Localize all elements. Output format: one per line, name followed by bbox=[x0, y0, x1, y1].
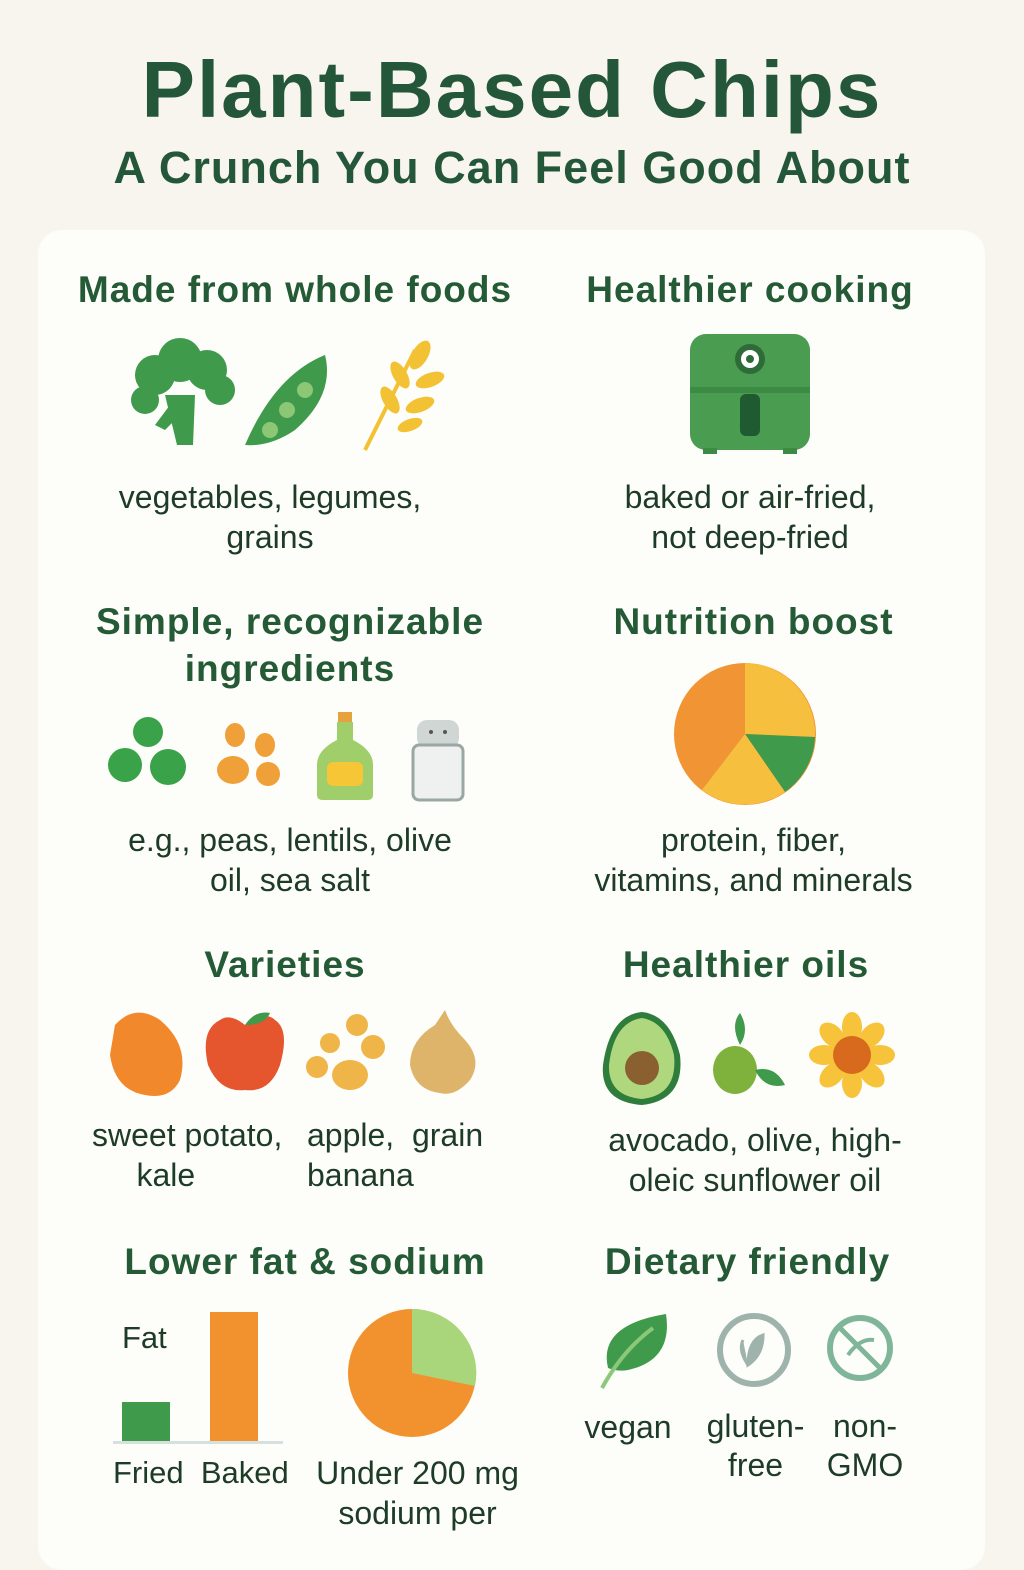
text: cooking: baked or air-fried, bbox=[625, 479, 875, 515]
text: vegan: vegan bbox=[584, 1409, 672, 1445]
text: gluten-free bbox=[707, 1408, 804, 1483]
text: varieties 2: apple, grain bbox=[307, 1117, 483, 1153]
text: non-GMO: non- bbox=[833, 1408, 897, 1444]
title: Plant-Based Chips bbox=[142, 45, 882, 134]
text: ingredients: e.g., peas, lentils, olive bbox=[128, 822, 452, 858]
labels: fried baked: Fried Baked bbox=[113, 1455, 289, 1490]
heading: simple ingredients: ingredients bbox=[185, 648, 395, 689]
heading: lower fat & sodium: Lower fat & sodium bbox=[124, 1241, 486, 1282]
bar: baked bbox=[210, 1312, 258, 1442]
icons: varieties bbox=[110, 1010, 476, 1096]
heading: nutrition boost: Nutrition boost bbox=[613, 601, 894, 642]
text: oils: avocado, olive, high- bbox=[608, 1122, 902, 1158]
text: nutrition bbox=[594, 822, 913, 898]
label: Fat: Fat bbox=[122, 1320, 167, 1355]
text: varieties 2: banana bbox=[307, 1157, 414, 1193]
heading: varieties: Varieties bbox=[204, 944, 366, 985]
bar: fried bbox=[122, 1402, 170, 1442]
icon: air fryer bbox=[690, 334, 810, 454]
text: oils: oleic sunflower oil bbox=[629, 1162, 881, 1198]
heading: healthier cooking: Healthier cooking bbox=[586, 269, 914, 310]
text: whole foods: vegetables, legumes, bbox=[119, 479, 421, 515]
subtitle: A Crunch You Can Feel Good About bbox=[114, 142, 910, 193]
text: nutrition: vitamins, and minerals bbox=[594, 862, 913, 898]
text: ingredients: oil, sea salt bbox=[210, 862, 370, 898]
text: whole foods: grains bbox=[226, 519, 314, 555]
text: oils bbox=[608, 1122, 902, 1198]
text: sodium: Under 200 mg bbox=[316, 1455, 519, 1491]
text: gluten-free: gluten- bbox=[707, 1408, 804, 1444]
heading: dietary friendly: Dietary friendly bbox=[605, 1241, 890, 1282]
text: cooking: not deep-fried bbox=[651, 519, 849, 555]
icons: vegan, gluten-free, non-GMO bbox=[600, 1313, 893, 1389]
text: gluten-free: free bbox=[728, 1447, 783, 1483]
text: non-GMO bbox=[827, 1408, 903, 1483]
text: sodium bbox=[316, 1455, 519, 1531]
text: varieties bbox=[92, 1117, 282, 1193]
text: varieties 2 bbox=[307, 1117, 483, 1193]
heading: simple ingredients: Simple, recognizable bbox=[96, 601, 484, 642]
text: ingredients bbox=[128, 822, 452, 898]
text: whole foods bbox=[118, 479, 421, 555]
text: sodium: sodium per bbox=[338, 1495, 497, 1531]
text: non-GMO: GMO bbox=[827, 1447, 903, 1483]
heading: simple ingredients bbox=[96, 601, 484, 689]
chart: sodium pie bbox=[348, 1309, 476, 1437]
heading: healthier oils: Healthier oils bbox=[623, 944, 869, 985]
panel: main card bbox=[38, 230, 985, 1570]
icons: broccoli, pea pod, wheat bbox=[131, 338, 444, 451]
text: varieties: kale bbox=[136, 1157, 195, 1193]
text: varieties: sweet potato, bbox=[92, 1117, 282, 1153]
text: nutrition: protein, fiber, bbox=[661, 822, 846, 858]
icons: peas, lentils, oil, salt bbox=[108, 712, 464, 802]
chart: fat bar chart bbox=[113, 1312, 289, 1490]
heading: whole foods: Made from whole foods bbox=[78, 269, 512, 310]
icons: avocado, olive, sunflower bbox=[602, 1012, 895, 1105]
chart: nutrition pie bbox=[674, 663, 816, 805]
text: cooking bbox=[625, 479, 875, 555]
